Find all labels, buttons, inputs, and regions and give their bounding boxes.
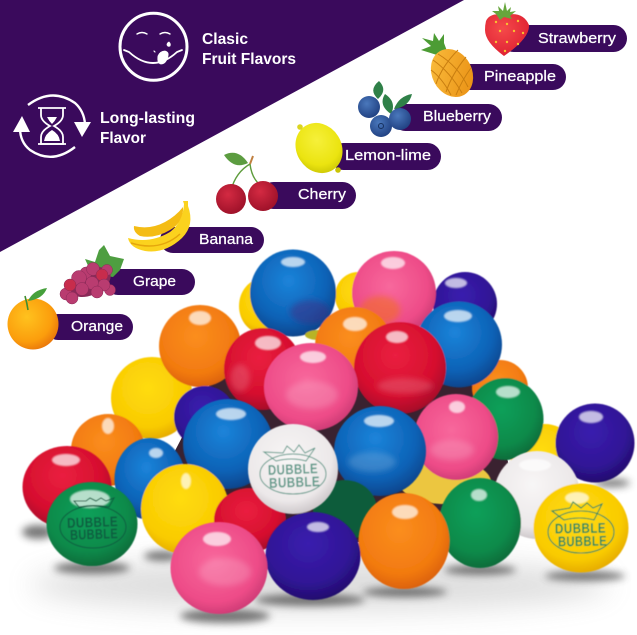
label: grape: Grape: [133, 273, 176, 290]
purple diagonal banner: [0, 0, 464, 252]
icon: pineapple: [421, 33, 481, 104]
gumball: yellow with logo: [534, 484, 628, 572]
gumballs front layer: [46, 424, 628, 614]
icon: smiley licking lips: [120, 13, 187, 80]
label: banana: [160, 227, 264, 253]
gumball: yellow with logo: DUBBLE: [555, 520, 606, 536]
gumball: yellow with logo: BUBBLE: [558, 533, 607, 549]
gumball pile: [22, 250, 634, 623]
label: cherry: [260, 182, 356, 209]
label: grape: [105, 269, 195, 295]
label: blueberry: [392, 104, 502, 131]
label: strawberry: [500, 25, 627, 52]
label: lemon-lime: Lemon-lime: [345, 147, 431, 164]
gumball: white with logo: [248, 424, 338, 514]
gumball: green with logo: DUBBLE: [67, 513, 118, 531]
gumballs back layer: [71, 250, 634, 504]
heading: long-lasting flavor: [100, 110, 195, 147]
gumballs middle layer: [22, 399, 426, 554]
label: pineapple: [450, 64, 566, 90]
label: pineapple: Pineapple: [484, 68, 556, 85]
heading: classic fruit flavors: Fruit Flavors: [202, 51, 296, 68]
label: cherry: Cherry: [298, 186, 347, 203]
soft ground shadow: [30, 559, 610, 611]
heading: classic fruit flavors: Clasic: [202, 31, 248, 48]
icon: lemon: [286, 114, 352, 182]
icon: bananas: [128, 201, 190, 251]
contact shadows: [22, 479, 630, 623]
gumball: green with logo: BUBBLE: [70, 525, 118, 543]
label: orange: Orange: [71, 318, 123, 335]
gumball: white with logo: DUBBLE: [268, 460, 318, 478]
icon: cherries: [216, 153, 278, 214]
gumball: green with logo: [46, 482, 138, 566]
label: blueberry: Blueberry: [423, 108, 492, 125]
heading: long-lasting flavor: Flavor: [100, 130, 146, 147]
label: strawberry: Strawberry: [538, 30, 617, 47]
label: banana: Banana: [199, 231, 254, 248]
icon: blueberries: [358, 81, 412, 137]
crevice backing: [165, 345, 510, 545]
heading: classic fruit flavors: [202, 31, 296, 68]
label: lemon-lime: [330, 143, 441, 170]
icon: grapes: [60, 245, 124, 304]
heading: long-lasting flavor: Long-lasting: [100, 110, 195, 127]
icon: hourglass with arrows: [13, 95, 91, 157]
label: orange: [45, 314, 133, 340]
icon: strawberry: [485, 2, 529, 56]
icon: orange: [8, 288, 58, 350]
gumball: white with logo: BUBBLE: [269, 473, 320, 491]
